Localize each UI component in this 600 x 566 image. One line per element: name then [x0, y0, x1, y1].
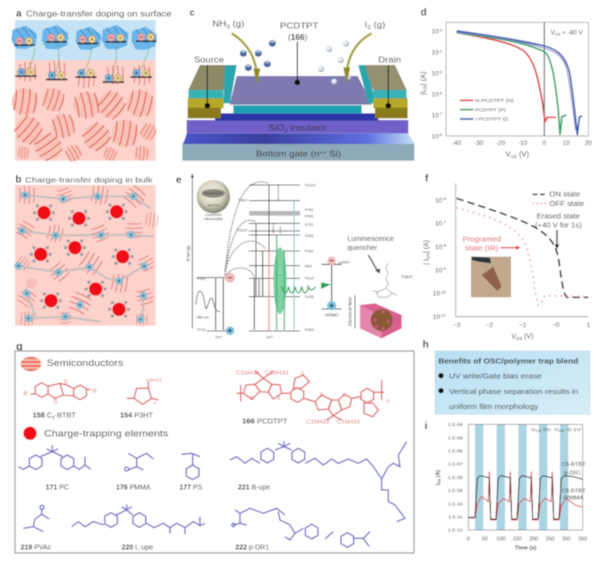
- heading d: d: [421, 8, 427, 19]
- LUMO HOMO levels: HOMO: [325, 312, 339, 317]
- arrows NH3 and I2: [232, 33, 372, 84]
- luminescence quencher label and arrow: quencher: [347, 243, 378, 252]
- panel i: time response plot: [425, 421, 587, 552]
- structure 154: [127, 378, 162, 406]
- energy axis: [186, 173, 194, 328]
- axis labels: DS: [426, 253, 431, 259]
- heading b: [15, 174, 153, 185]
- structure 166 atom labels: C16H33: [265, 370, 288, 376]
- red curve: [468, 472, 583, 520]
- structure 158: S: [53, 400, 57, 406]
- programed state callout: Programed: [463, 236, 501, 243]
- structure 158: R: [23, 391, 28, 397]
- charge transfer pairs: [14, 33, 157, 83]
- level labels: ⁴I13/2: [304, 295, 314, 299]
- label 219: 219 PVAc: [21, 544, 52, 551]
- axis labels: -6: [439, 91, 442, 95]
- level labels: ⁴I15/2: [304, 328, 314, 332]
- axis labels: 10: [435, 244, 442, 251]
- device stack: [182, 76, 414, 161]
- axis labels: 0: [543, 140, 547, 147]
- device labels: (g): [230, 19, 245, 29]
- device labels: 2: [284, 128, 288, 134]
- transitions: [196, 182, 316, 330]
- axis labels: 1.E-07: [448, 462, 463, 468]
- plot frame: [446, 22, 588, 136]
- axis labels: 10: [432, 71, 439, 78]
- structure 166 atom labels: C16H33: [236, 370, 259, 376]
- heading c: c: [190, 8, 195, 18]
- carriers: [226, 273, 234, 335]
- axis labels: | (A): [423, 240, 430, 253]
- axis labels: -8: [442, 243, 447, 248]
- structure 176: [125, 453, 153, 471]
- device labels: NH: [212, 19, 224, 29]
- benefits callout: [435, 351, 590, 414]
- device labels: Source: [194, 54, 224, 64]
- energy levels: [197, 185, 300, 331]
- axis labels: V: [531, 427, 534, 433]
- level labels: ⁴F7/2: [304, 223, 313, 227]
- structure 166 atom labels: S: [277, 396, 281, 402]
- axis labels: [418, 28, 592, 159]
- device photo: [471, 257, 511, 297]
- axis labels: −2: [486, 322, 493, 329]
- panel d: transfer curves: [418, 8, 592, 159]
- structure 166 atom labels: S: [320, 393, 324, 399]
- device labels: SiO: [268, 123, 282, 133]
- structure 219: [23, 505, 49, 532]
- structure 166 atom labels: C16H33: [306, 419, 329, 425]
- panel h: benefits box: [423, 340, 590, 414]
- legend: [533, 190, 584, 208]
- axis labels: 1.E-05: [448, 435, 463, 441]
- axis labels: -7: [439, 112, 442, 116]
- positive carriers: [15, 191, 148, 323]
- dopant layer: [11, 20, 157, 60]
- structure 158: R: [92, 389, 97, 395]
- electrical field arrow: Electrical field: [348, 297, 353, 326]
- level labels: ⁴G11/2: [304, 184, 316, 188]
- axis labels: -0.1V: [564, 427, 582, 433]
- structure 166 atom labels: S: [343, 393, 347, 399]
- axis labels: |I: [418, 91, 427, 95]
- axis labels: DS: [423, 85, 428, 91]
- right materials: [230, 370, 407, 551]
- panel c: transistor device schematic: [182, 8, 414, 161]
- benefits callout: Benefits of OSC/polymer trap blend: [438, 356, 578, 365]
- LUMO HOMO levels: [322, 256, 350, 317]
- level labels: ²H9/2: [238, 199, 247, 203]
- wave arrow head: [321, 282, 331, 289]
- axis labels: -9: [442, 266, 447, 271]
- axis labels: 10: [432, 92, 439, 99]
- axis labels: 250: [546, 536, 554, 542]
- structure 220: [72, 504, 205, 534]
- axis labels: -20: [496, 140, 506, 147]
- legend: N-PCDTPT (N): [475, 98, 514, 104]
- axis labels: 1.E-10: [448, 501, 463, 507]
- legend: [460, 98, 514, 123]
- axis labels: −3: [453, 322, 461, 329]
- benefits callout: uniform film morphology: [449, 402, 539, 411]
- axis labels: 50: [482, 536, 488, 542]
- left materials: [18, 357, 205, 551]
- benefits callout: Vertical phase separation results in: [449, 387, 578, 396]
- device labels: [194, 19, 401, 159]
- level labels: ⁴I9/2: [304, 264, 312, 268]
- axis labels: -10: [440, 289, 447, 294]
- label 171: 171 PC: [46, 485, 69, 492]
- axis labels: -5: [439, 70, 442, 74]
- axis labels: 0V, V: [541, 427, 559, 433]
- heading h: h: [423, 340, 429, 351]
- luminescence quencher label and arrow: Luminescence: [347, 234, 394, 243]
- label 176: 176 PMMA: [116, 485, 151, 492]
- axis labels: -40: [452, 140, 462, 147]
- axis labels: 10: [433, 314, 440, 321]
- LUMO HOMO levels: LUMO: [338, 259, 350, 264]
- device labels: I: [365, 19, 367, 29]
- legend: ON state: [549, 190, 580, 199]
- axis labels: 10: [435, 267, 442, 274]
- axis labels: 1: [586, 322, 590, 329]
- axis labels: DS: [558, 429, 565, 433]
- axis labels: 10: [435, 221, 442, 228]
- axis labels: -10: [518, 140, 528, 147]
- structure 166 atom labels: C16H33: [337, 419, 360, 425]
- materials box: [15, 351, 414, 553]
- semiconductor layer: [10, 60, 159, 165]
- label 154: 154 P3HT: [120, 411, 154, 420]
- heading b: b: [15, 174, 21, 185]
- heading g: g: [16, 341, 23, 353]
- axis labels: −1: [519, 322, 527, 329]
- legend: OFF state: [549, 199, 584, 208]
- heading a: Charge-transfer doping on surface: [26, 8, 172, 18]
- axis labels: DS: [437, 478, 441, 484]
- heading a: a: [16, 9, 22, 20]
- axis labels: DS: [555, 32, 561, 37]
- axis labels: -3: [439, 28, 442, 32]
- series labels: C8-BTBT: [562, 462, 586, 468]
- level labels: ²F7/2: [197, 328, 206, 332]
- axis labels: (A): [435, 470, 441, 479]
- level labels: Er³⁺: [267, 335, 274, 339]
- axis labels: 10: [563, 140, 570, 147]
- axis labels: 20: [585, 140, 592, 147]
- label 220: 220 L-upe: [122, 544, 153, 551]
- structure 158: [23, 380, 97, 406]
- axis labels: 10: [432, 112, 439, 119]
- P3HT molecule: P3HT: [402, 274, 413, 279]
- axis labels: 10: [432, 50, 439, 57]
- icon: core shell nanocrystal: NaYbF4:Er: [204, 192, 223, 196]
- axis labels: Time (s): [515, 546, 537, 552]
- level labels: 980 nm: [197, 315, 209, 319]
- panel b: charge-transfer doping in bulk: [15, 174, 159, 326]
- nanocrystal in box: [360, 303, 402, 338]
- axis labels: = -80 V: [560, 29, 584, 36]
- level labels: ⁴F9/2: [304, 249, 313, 253]
- axis labels: -4: [439, 49, 442, 53]
- structure 154: n: [153, 400, 156, 406]
- device labels: (166): [288, 32, 308, 42]
- icon: red dot: [23, 427, 37, 440]
- structure 171: [18, 445, 91, 470]
- plot frame: [456, 183, 588, 317]
- label charge-trapping: Charge-trapping elements: [44, 429, 169, 439]
- heading f: f: [425, 174, 429, 185]
- axis labels: -7: [442, 219, 447, 224]
- charge-trapping elements: [30, 203, 134, 318]
- energy axis: Energy: [186, 245, 192, 261]
- luminescence quencher label and arrow: [347, 234, 394, 274]
- curves: [457, 198, 588, 305]
- label 158: 158 C: [33, 411, 52, 420]
- series labels: /p-DR1: [563, 471, 581, 477]
- axis labels: [423, 196, 590, 341]
- structure 166: [237, 371, 384, 420]
- panel e: energy diagram: [176, 173, 413, 339]
- source electrode: [188, 65, 237, 118]
- axis labels: 10: [435, 197, 442, 204]
- axis labels: -8: [439, 133, 442, 137]
- level labels: ⁴F5/2: [304, 214, 313, 218]
- device labels: Bottom gate (n: [256, 149, 311, 159]
- benefits callout: UV write/Gate bias erase: [449, 372, 542, 381]
- panel f: memory transfer curves: [423, 174, 590, 341]
- level labels: ⁴F3/2: [304, 208, 313, 212]
- programed state callout: [463, 236, 521, 252]
- axis labels: -30: [474, 140, 484, 147]
- structure 177: [182, 453, 200, 480]
- axis labels: GS: [516, 336, 522, 341]
- axis labels: | I: [423, 259, 430, 265]
- axis labels: I: [435, 484, 441, 485]
- P3HT molecule: [372, 263, 413, 297]
- level labels: ²F5/2: [197, 277, 206, 281]
- icon: semiconductor stripes: [20, 357, 42, 371]
- label 222: 222 p-DR1: [235, 544, 269, 551]
- label 177: 177 PS: [179, 485, 203, 492]
- device labels: 3: [226, 24, 230, 30]
- axis labels: GS: [511, 154, 517, 159]
- panel a: charge-transfer doping on surface: [10, 8, 172, 165]
- axis labels: −0: [552, 322, 560, 329]
- device labels: insulator: [288, 123, 327, 133]
- axis labels: 350: [578, 536, 587, 542]
- pointers: [205, 42, 391, 108]
- axis labels: 1.E-09: [448, 488, 463, 494]
- axis labels: 150: [513, 536, 522, 542]
- axis labels: 100: [497, 536, 505, 542]
- icon: core shell nanocrystal: NaYF4: [208, 203, 219, 207]
- heading e: e: [176, 175, 182, 186]
- axis labels: | (A): [418, 71, 427, 85]
- axis labels: GS: [535, 429, 542, 433]
- icon: core shell nanocrystal: Core/shell: [205, 213, 222, 217]
- structure 166 atom labels: [236, 370, 390, 425]
- axis labels: -6: [442, 196, 447, 201]
- level labels: ⁴S3/2: [304, 234, 313, 238]
- series labels: C8-BTBT: [562, 488, 586, 494]
- heading i: i: [425, 421, 428, 432]
- curves: [457, 31, 582, 135]
- level labels: ²H11/2: [237, 229, 247, 233]
- level labels: [197, 184, 316, 339]
- axis labels: 10: [433, 291, 440, 298]
- erased state callout: [535, 214, 582, 249]
- device labels: Si): [327, 149, 341, 159]
- plot frame: [468, 424, 583, 530]
- erased state callout: Erased state: [537, 214, 580, 221]
- axis labels: 1.E-11: [448, 515, 463, 521]
- label 158: 8: [52, 415, 55, 420]
- icon: core shell nanocrystal: [197, 180, 230, 221]
- series labels: [562, 462, 586, 502]
- polymer connections: [18, 195, 153, 322]
- axis labels: (V): [517, 150, 530, 159]
- structure 166 atom labels: S: [250, 396, 254, 402]
- label semiconductors: Semiconductors: [47, 358, 124, 368]
- axis labels: V: [505, 150, 511, 159]
- black curve: [468, 476, 583, 519]
- axis labels: 10: [432, 133, 439, 140]
- series labels: /PMMA: [563, 496, 584, 502]
- programed state callout: state (IR): [465, 245, 498, 252]
- axis labels: 300: [562, 536, 571, 542]
- drain electrode: [358, 65, 408, 118]
- erased state callout: (+40 V for 1s): [535, 223, 582, 230]
- structure 166 atom labels: S: [301, 372, 305, 378]
- axis labels: 1.E-12: [448, 528, 463, 534]
- green emission ellipse: [273, 247, 287, 314]
- axis labels: 1.E-04: [448, 422, 463, 428]
- axis labels: V: [551, 29, 555, 36]
- gas molecules: [240, 40, 351, 85]
- label 221: 221 B-upe: [238, 484, 270, 491]
- axis labels: [435, 422, 587, 552]
- structure 154: C6H13: [146, 378, 162, 384]
- device labels: ++: [319, 151, 327, 157]
- UV bands: [475, 424, 568, 530]
- axis labels: 1.E-06: [448, 448, 463, 454]
- legend: PCDTPT (P): [475, 107, 506, 113]
- heading b: Charge-transfer doping in bulk: [25, 175, 153, 184]
- axis labels: 1.E-08: [448, 475, 463, 481]
- axis labels: -11: [440, 313, 446, 318]
- label 166: 166 PCDTPT: [242, 416, 288, 425]
- structure 221: [230, 441, 407, 522]
- structure 222: [232, 508, 370, 547]
- structure 166 atom labels: n: [387, 398, 390, 404]
- axis labels: V: [511, 334, 516, 341]
- axis labels: 10: [432, 29, 439, 36]
- device labels: PCDTPT: [280, 20, 318, 30]
- label 158: -BTBT: [55, 411, 76, 420]
- structure 158: S: [64, 380, 68, 386]
- device labels: 2: [367, 25, 371, 31]
- axis labels: (V): [522, 334, 533, 341]
- bulk background and domains: [15, 184, 159, 326]
- panel g: materials structures: [15, 341, 414, 553]
- device labels: Drain: [378, 54, 401, 64]
- level labels: ⁴I11/2: [304, 276, 314, 280]
- legend: I-PCDTPT (I): [475, 117, 509, 123]
- electrical field arrow: [348, 295, 355, 328]
- icon: core shell nanocrystal: nanocrystal: [204, 217, 223, 221]
- axis labels: 200: [529, 536, 538, 542]
- axis labels: 0: [467, 536, 470, 542]
- level labels: Yb³⁺: [215, 335, 223, 339]
- device labels: (g): [371, 19, 386, 29]
